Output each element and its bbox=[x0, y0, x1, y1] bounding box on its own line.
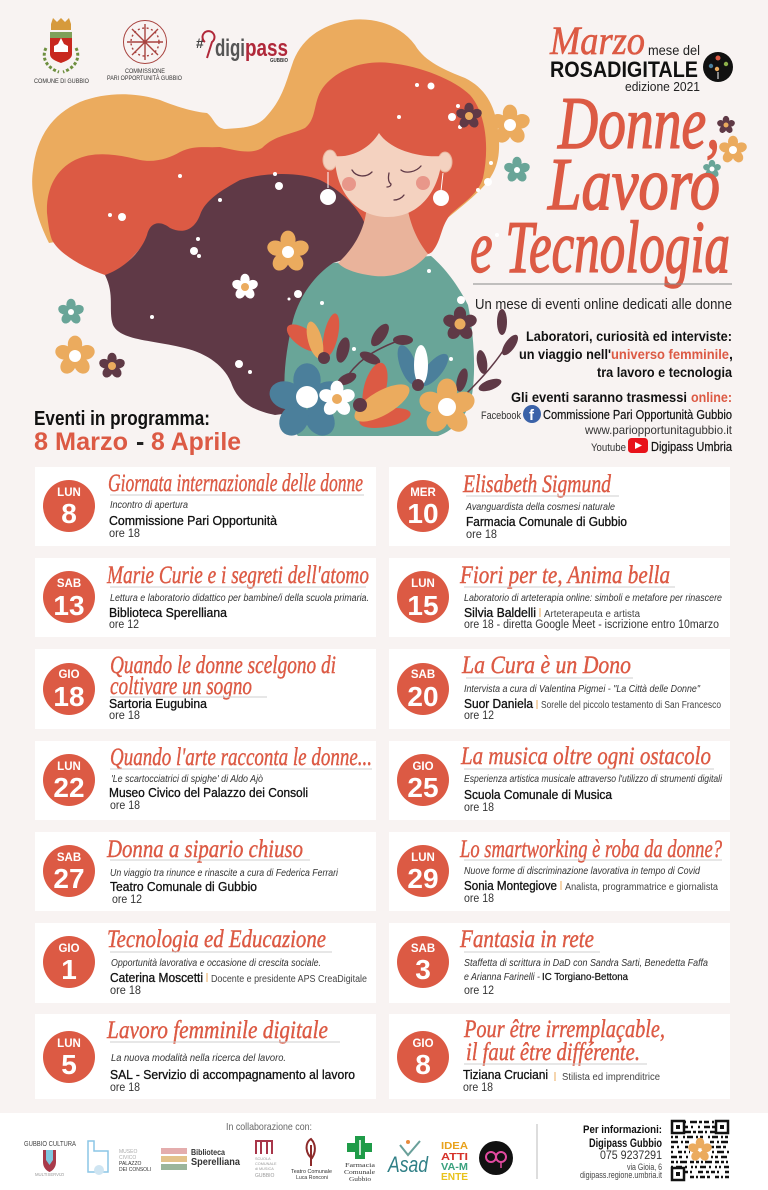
event card: 8 marzo: Giornata internazionale delle donne bbox=[108, 470, 363, 497]
date badge: SAB bbox=[411, 669, 435, 681]
flowers scattered bbox=[53, 103, 748, 379]
logo: Scuola di Musica: GUBBIO bbox=[255, 1173, 275, 1179]
logo: Comune di Gubbio: COMUNE DI GUBBIO bbox=[34, 78, 89, 85]
date badge: 8 bbox=[415, 1049, 431, 1080]
date badge: 15 bbox=[407, 590, 439, 621]
date badge: LUN bbox=[57, 487, 81, 499]
flower: red and yellow large bbox=[349, 360, 415, 431]
logo: Farmacia Comunale bbox=[344, 1136, 375, 1183]
description: un viaggio nell' bbox=[519, 346, 611, 362]
flower: yellow bbox=[417, 378, 477, 436]
logo: Teatro Comunale: Teatro Comunale bbox=[291, 1169, 332, 1175]
logo: Commissione Pari Opportunità: PARI OPPORTUNITÀ GUBBIO bbox=[107, 73, 182, 82]
event card: 25 marzo: Scuola Comunale di Musica bbox=[464, 788, 612, 802]
date badge: LUN bbox=[57, 761, 81, 773]
face details bbox=[352, 166, 421, 200]
event card: 22 marzo: 'Le scartocciatrici di spighe' di Aldo Ajò bbox=[111, 774, 263, 785]
event card: 15 marzo: ore 18 - diretta Google Meet - iscrizione entro 10marzo bbox=[464, 619, 719, 631]
event card: 8 aprile: il faut être différente. bbox=[466, 1039, 640, 1066]
logo: Idea Attivamente: IDEA bbox=[441, 1141, 468, 1152]
contact info bbox=[580, 1124, 662, 1180]
event card: 15 marzo: Fiori per te, Anima bella bbox=[459, 562, 670, 589]
event card: 8 aprile: Tiziana Cruciani bbox=[463, 1068, 548, 1082]
logo: Gubbio Cultura: GUBBIO CULTURA bbox=[24, 1139, 76, 1148]
logo: Farmacia Comunale: Gubbio bbox=[349, 1176, 371, 1183]
logo: Museo Civico: MUSEO bbox=[119, 1149, 137, 1155]
date badge: SAB bbox=[411, 943, 435, 955]
event card: 20 marzo: La Cura è un Dono bbox=[461, 652, 631, 679]
logo: La Città delle Donne bbox=[479, 1141, 513, 1175]
streaming info: www.pariopportunitagubbio.it bbox=[584, 423, 733, 437]
date badge: LUN bbox=[411, 578, 435, 590]
event card: 1 aprile: Docente e presidente APS CreaDigitale bbox=[211, 974, 367, 985]
logo: Biblioteca Sperelliana bbox=[161, 1147, 240, 1170]
date badge: GIO bbox=[412, 761, 434, 773]
event card: 8 aprile: Stilista ed imprenditrice bbox=[562, 1072, 660, 1083]
logo: Biblioteca Sperelliana: Sperelliana bbox=[191, 1157, 240, 1168]
contact info: Per informazioni: bbox=[583, 1124, 662, 1136]
main title: Lavoro bbox=[547, 144, 720, 226]
qr code bbox=[671, 1121, 729, 1180]
event card: 22 marzo: Museo Civico del Palazzo dei Consoli bbox=[109, 786, 308, 800]
collaboration heading: In collaborazione con: bbox=[226, 1121, 312, 1133]
event card: 8 aprile: ore 18 bbox=[463, 1082, 493, 1094]
event card: 3 aprile: IC Torgiano-Bettona bbox=[542, 972, 628, 983]
main title: Donne, bbox=[557, 83, 720, 165]
footer band bbox=[0, 1113, 768, 1190]
logo: Scuola di Musica bbox=[255, 1141, 277, 1179]
neck bbox=[338, 205, 428, 276]
cheeks bbox=[342, 176, 430, 191]
event card: 18 marzo: Quando le donne scelgono di bbox=[110, 652, 336, 679]
event card: 1 aprile bbox=[35, 923, 376, 1003]
event card: 22 marzo: ore 18 bbox=[110, 800, 140, 812]
date badge bbox=[397, 571, 449, 623]
body: teal sweater bbox=[284, 256, 474, 436]
event card: 8 marzo: ore 18 bbox=[109, 528, 140, 540]
date badge: 18 bbox=[53, 681, 85, 712]
programme heading: Eventi in programma: bbox=[34, 408, 210, 430]
date badge: SAB bbox=[57, 578, 81, 590]
logo: Idea Attivamente: ATTI bbox=[441, 1152, 468, 1163]
event card: 20 marzo: Intervista a cura di Valentina Pigmei - "La Città delle Donne" bbox=[464, 684, 700, 695]
ears bbox=[323, 150, 452, 172]
event card: 13 marzo: Lettura e laboratorio didattico per bambine/i della scuola primaria. bbox=[110, 593, 369, 604]
event card: 25 marzo: ore 18 bbox=[464, 802, 494, 814]
date badge: 22 bbox=[53, 772, 85, 803]
event card: 3 aprile: ore 12 bbox=[464, 985, 494, 997]
event card: 1 aprile: Opportunità lavorativa e occasione di crescita sociale. bbox=[111, 958, 321, 969]
header: Marzo mese del Rosadigitale: edizione 2021 bbox=[625, 79, 700, 94]
logo: digipass: pass bbox=[245, 35, 288, 62]
date badge: LUN bbox=[411, 852, 435, 864]
date badge bbox=[43, 936, 95, 988]
date badge bbox=[397, 845, 449, 897]
date badge: SAB bbox=[57, 852, 81, 864]
event card: 18 marzo: ore 18 bbox=[109, 710, 140, 722]
date badge: 25 bbox=[407, 772, 439, 803]
event card: 13 marzo: Marie Curie e i segreti dell'atomo bbox=[106, 562, 369, 589]
header: Marzo mese del Rosadigitale: ROSADIGITALE bbox=[550, 57, 698, 82]
event card: 27 marzo bbox=[35, 832, 376, 911]
date badge bbox=[43, 480, 95, 532]
programme heading: - bbox=[136, 428, 144, 456]
event card: 5 aprile: La nuova modalità nella ricerca del lavoro. bbox=[111, 1053, 286, 1064]
event card: 10 marzo: Avanguardista della cosmesi naturale bbox=[465, 502, 615, 513]
date badge: GIO bbox=[412, 1038, 434, 1050]
date badge: 10 bbox=[407, 498, 439, 529]
logo: Museo Civico: PALAZZO bbox=[119, 1161, 142, 1167]
illustration: woman with flowing hair bbox=[32, 19, 748, 441]
date badge: 1 bbox=[61, 954, 77, 985]
event card: 5 aprile: SAL - Servizio di accompagnamento al lavoro bbox=[110, 1068, 355, 1082]
event card: 27 marzo: Donna a sipario chiuso bbox=[106, 836, 303, 863]
date badge: GIO bbox=[58, 943, 80, 955]
logo: digipass: digi bbox=[215, 35, 245, 62]
event card: 20 marzo bbox=[389, 649, 730, 729]
date badge: MER bbox=[410, 487, 436, 499]
date badge bbox=[397, 663, 449, 715]
header: Marzo mese del Rosadigitale: Marzo bbox=[549, 18, 645, 63]
logo: Scuola di Musica: di MUSICA bbox=[255, 1167, 274, 1171]
hair: yellow layer bbox=[32, 19, 499, 243]
event card: 5 aprile: Lavoro femminile digitale bbox=[106, 1017, 328, 1044]
hair: red layer bbox=[47, 62, 486, 275]
description: , bbox=[729, 346, 733, 362]
face bbox=[335, 133, 442, 217]
programme heading: 8 Aprile bbox=[151, 428, 241, 456]
streaming info: Digipass Umbria bbox=[651, 440, 732, 454]
logo: Idea Attivamente: ENTE bbox=[441, 1172, 468, 1183]
event card: 22 marzo: Quando l'arte racconta le donne... bbox=[110, 744, 372, 771]
date badge bbox=[397, 754, 449, 806]
event card: 1 aprile: ore 18 bbox=[110, 985, 141, 997]
date badge: 20 bbox=[407, 681, 439, 712]
date badge bbox=[43, 754, 95, 806]
event card: 3 aprile: Staffetta di scrittura in DaD con Sandra Sarti, Benedetta Faffa bbox=[464, 958, 708, 969]
logo: Biblioteca Sperelliana: Biblioteca bbox=[191, 1147, 225, 1157]
icon: facebook: f bbox=[529, 407, 535, 424]
date badge: GIO bbox=[58, 669, 80, 681]
flower: blue tulip bbox=[393, 343, 453, 391]
logo: Commissione Pari Opportunità: COMMISSIONE bbox=[125, 68, 166, 75]
contact info: 075 9237291 bbox=[600, 1148, 662, 1162]
logo: Farmacia Comunale: Farmacia bbox=[345, 1162, 375, 1169]
flower: white bbox=[318, 381, 356, 418]
earrings bbox=[320, 172, 448, 206]
event card: 1 aprile: Caterina Moscetti bbox=[110, 971, 203, 985]
icon: youtube bbox=[628, 438, 648, 453]
logo: Museo Civico: DEI CONSOLI bbox=[119, 1167, 151, 1173]
event card: 10 marzo: ore 18 bbox=[466, 529, 497, 541]
logo: Idea Attivamente: VA-M bbox=[441, 1162, 468, 1173]
event card: 1 aprile: Tecnologia ed Educazione bbox=[107, 926, 326, 953]
logo: Farmacia Comunale: Comunale bbox=[344, 1169, 375, 1176]
event card: 18 marzo: Sartoria Eugubina bbox=[109, 697, 207, 711]
logo: Teatro Comunale: Luca Ronconi bbox=[296, 1175, 328, 1181]
event card: 13 marzo bbox=[35, 558, 376, 637]
streaming info: Commissione Pari Opportunità Gubbio bbox=[543, 408, 732, 422]
event card: 25 marzo bbox=[389, 741, 730, 820]
date badge bbox=[397, 936, 449, 988]
programme heading bbox=[34, 408, 241, 456]
streaming info: Gli eventi saranno trasmessi bbox=[511, 389, 687, 405]
description: tra lavoro e tecnologia bbox=[597, 364, 732, 380]
logo: Comune di Gubbio bbox=[34, 18, 89, 85]
subtitle: Un mese di eventi online dedicati alle donne bbox=[475, 296, 732, 313]
date badge bbox=[43, 663, 95, 715]
event card: 8 marzo: Incontro di apertura bbox=[110, 500, 188, 511]
date badge: 13 bbox=[53, 590, 85, 621]
event card: 27 marzo: ore 12 bbox=[112, 894, 142, 906]
event card: 15 marzo: Arteterapeuta e artista bbox=[544, 609, 640, 620]
logo: Scuola di Musica: SCUOLA bbox=[255, 1157, 271, 1161]
contact info: via Gioia, 6 bbox=[627, 1162, 662, 1172]
streaming info: Facebook bbox=[481, 410, 521, 422]
date badge bbox=[43, 571, 95, 623]
description bbox=[519, 328, 733, 380]
description: Laboratori, curiosità ed interviste: bbox=[526, 328, 732, 344]
date badge bbox=[43, 1031, 95, 1083]
date badge bbox=[397, 1031, 449, 1083]
logo: Idea Attivamente bbox=[441, 1141, 468, 1183]
event card: 5 aprile bbox=[35, 1014, 376, 1099]
event card: 29 marzo: Sonia Montegiove bbox=[464, 879, 557, 893]
contact info: digipass.regione.umbria.it bbox=[580, 1170, 662, 1180]
streaming info bbox=[481, 389, 733, 454]
logo: Commissione Pari Opportunità bbox=[107, 20, 182, 82]
date badge: 8 bbox=[61, 498, 77, 529]
header: Marzo mese del Rosadigitale bbox=[549, 18, 733, 94]
logo: Scuola di Musica: COMUNALE bbox=[255, 1162, 277, 1166]
floating dots bbox=[108, 82, 499, 374]
logo: Museo Civico bbox=[88, 1141, 151, 1175]
event card: 8 marzo bbox=[35, 467, 376, 546]
date badge bbox=[397, 480, 449, 532]
event card: 15 marzo bbox=[389, 558, 730, 637]
event card: 8 aprile: Pour être irremplaçable, bbox=[463, 1016, 665, 1043]
event card: 3 aprile bbox=[389, 923, 730, 1003]
description: universo femminile bbox=[611, 346, 729, 362]
logo: Gubbio Cultura bbox=[24, 1139, 76, 1177]
logo: Teatro Comunale bbox=[291, 1139, 332, 1181]
contact info: Digipass Gubbio bbox=[589, 1138, 662, 1150]
event card: 10 marzo: Farmacia Comunale di Gubbio bbox=[466, 515, 627, 529]
event card: 3 aprile: e Arianna Farinelli - bbox=[464, 972, 541, 983]
programme heading: 8 Marzo bbox=[34, 428, 128, 456]
logo: Museo Civico: CIVICO bbox=[119, 1155, 136, 1161]
event card: 20 marzo: ore 12 bbox=[464, 710, 494, 722]
date badge: LUN bbox=[57, 1038, 81, 1050]
event card: 18 marzo: coltivare un sogno bbox=[110, 673, 252, 700]
logo: Asad: Asad bbox=[386, 1152, 429, 1177]
event card: 8 marzo: Commissione Pari Opportunità bbox=[109, 514, 277, 528]
bouquet bbox=[266, 309, 521, 441]
event card: 3 aprile: Fantasia in rete bbox=[459, 926, 594, 953]
logo: digipass bbox=[196, 31, 288, 64]
event card: 10 marzo: Elisabeth Sigmund bbox=[462, 471, 611, 498]
date badge: 29 bbox=[407, 863, 439, 894]
qr flower bbox=[687, 1138, 713, 1162]
event card: 18 marzo bbox=[35, 649, 376, 729]
date badge: 3 bbox=[415, 954, 431, 985]
event card: 8 aprile bbox=[389, 1014, 730, 1099]
event card: 25 marzo: Esperienza artistica musicale attraverso l'utilizzo di strumenti digitali bbox=[464, 774, 723, 785]
event card: 15 marzo: Laboratorio di arteterapia online: simboli e metafore per rinascere bbox=[464, 593, 722, 604]
event card: 25 marzo: La musica oltre ogni ostacolo bbox=[460, 743, 711, 770]
icon: Rosadigitale badge bbox=[703, 52, 733, 82]
hair: dark layer bbox=[105, 174, 367, 415]
event card: 29 marzo: Analista, programmatrice e giornalista bbox=[565, 882, 718, 893]
date badge bbox=[43, 845, 95, 897]
event card: 29 marzo: Nuove forme di discriminazione lavorativa in tempo di Covid bbox=[464, 866, 700, 877]
event card: 5 aprile: ore 18 bbox=[110, 1082, 140, 1094]
logo: Asad bbox=[386, 1140, 429, 1177]
streaming info: online: bbox=[691, 389, 732, 405]
flower: big blue bbox=[266, 363, 348, 441]
event card: 20 marzo: Sorelle del piccolo testamento di San Francesco bbox=[541, 700, 721, 711]
date badge: 27 bbox=[53, 863, 85, 894]
streaming info: Youtube bbox=[591, 442, 626, 454]
event card: 29 marzo: ore 18 bbox=[464, 893, 494, 905]
event card: 27 marzo: Un viaggio tra rinunce e rinascite a cura di Federica Ferrari bbox=[110, 868, 339, 879]
event card: 13 marzo: ore 12 bbox=[109, 619, 139, 631]
header: Marzo mese del Rosadigitale: mese del bbox=[648, 42, 700, 58]
date badge: 5 bbox=[61, 1049, 77, 1080]
event card: 22 marzo bbox=[35, 741, 376, 820]
logo: Gubbio Cultura: MULTISERVIZI bbox=[35, 1172, 64, 1177]
flower: red and yellow tulip bbox=[282, 312, 342, 364]
logo: digipass: # bbox=[196, 35, 204, 51]
main title bbox=[470, 83, 730, 289]
icon: facebook bbox=[523, 405, 541, 424]
event card: 20 marzo: Suor Daniela bbox=[464, 697, 533, 711]
event card: 10 marzo bbox=[389, 467, 730, 546]
logo: digipass: GUBBIO bbox=[270, 58, 288, 64]
event card: 29 marzo bbox=[389, 832, 730, 911]
event card: 15 marzo: Silvia Baldelli bbox=[464, 606, 536, 620]
event card: 13 marzo: Biblioteca Sperelliana bbox=[109, 606, 227, 620]
event card: 27 marzo: Teatro Comunale di Gubbio bbox=[110, 880, 257, 894]
